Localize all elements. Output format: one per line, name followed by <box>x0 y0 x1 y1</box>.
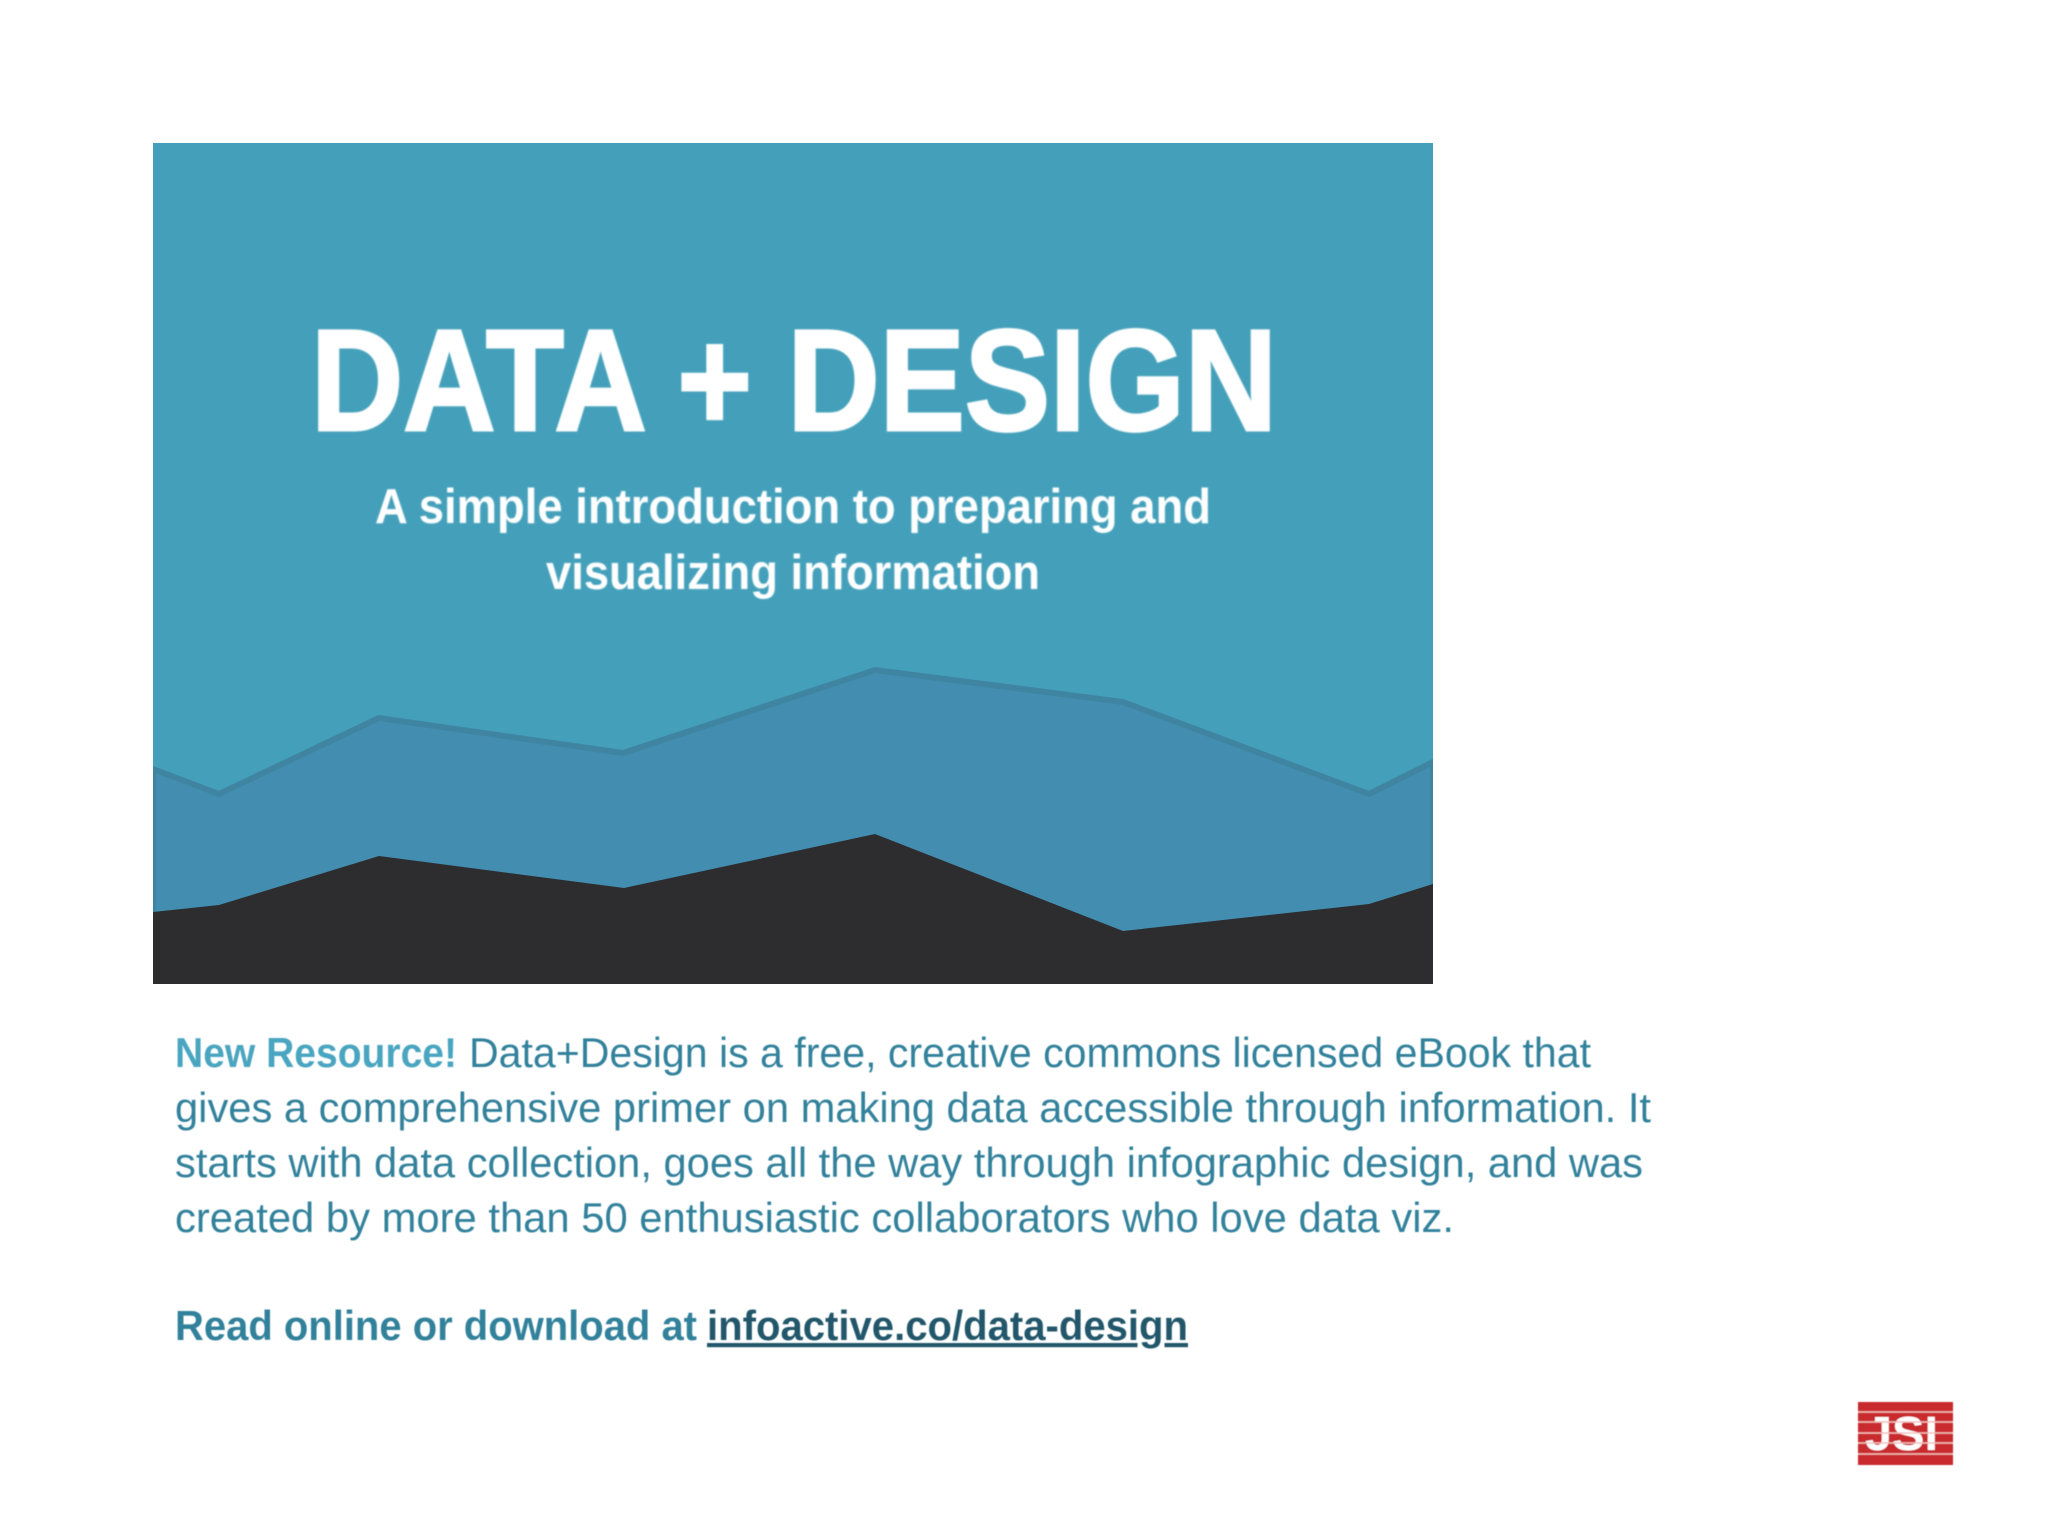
description text block: gives a comprehensive primer on making data accessible through information. It <box>175 1084 1651 1131</box>
panel: book cover <box>153 143 1433 984</box>
description text block: Data+Design is a free, creative commons licensed eBook that <box>469 1029 1591 1076</box>
cover subtitle: A simple introduction to preparing and <box>375 480 1211 534</box>
logo wordmark: JSI <box>1865 1408 1938 1461</box>
cover subtitle <box>375 480 1211 600</box>
mid-tone mountain band <box>153 667 1433 931</box>
cover subtitle: visualizing information <box>546 546 1040 600</box>
description text block: New Resource! <box>175 1029 457 1076</box>
logo: JSI <box>1858 1402 1953 1465</box>
description text block <box>175 1029 1651 1241</box>
link: infoactive.co/data-design <box>707 1302 1188 1349</box>
cover title: DATA + DESIGN <box>311 300 1277 461</box>
dark mountain band <box>153 834 1433 984</box>
description text block: starts with data collection, goes all the way through infographic design, and was <box>175 1139 1643 1186</box>
download call to action <box>175 1302 1188 1349</box>
description text block: created by more than 50 enthusiastic collaborators who love data viz. <box>175 1194 1454 1241</box>
download call to action: Read online or download at <box>175 1302 697 1349</box>
